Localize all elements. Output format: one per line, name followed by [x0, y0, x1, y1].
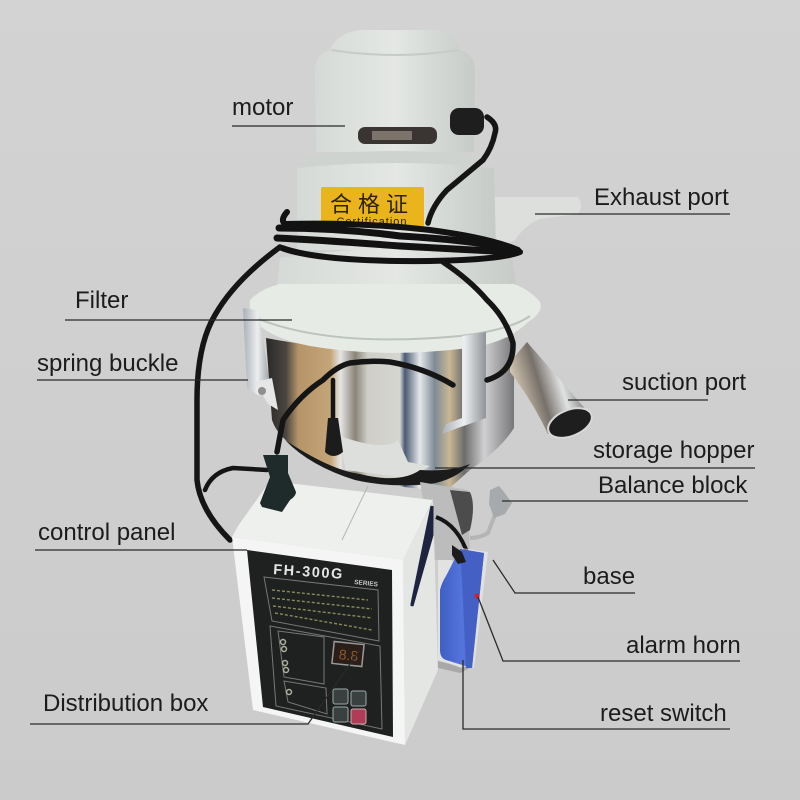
power plug — [260, 455, 296, 512]
labels: Exhaust port — [594, 184, 729, 211]
suction port pipe — [510, 342, 596, 444]
labels: suction port — [622, 369, 746, 396]
middle housing — [297, 163, 496, 250]
alarm horn — [440, 545, 488, 668]
spring buckle right — [442, 332, 486, 434]
cable gland — [450, 108, 484, 135]
lower dome — [276, 249, 518, 296]
spring buckle left — [243, 308, 278, 410]
neck and base — [420, 482, 470, 560]
power cables — [197, 117, 513, 540]
reflection in hopper — [340, 436, 430, 478]
labels: reset switch — [600, 700, 727, 727]
product: vacuum hopper loader — [197, 30, 596, 745]
labels — [37, 94, 754, 727]
keypad — [333, 689, 366, 724]
labels: base — [583, 563, 635, 590]
digital display — [332, 641, 364, 667]
storage hopper — [266, 336, 514, 492]
black panel: SERIES — [354, 579, 379, 589]
control box — [232, 481, 438, 745]
box right face — [403, 501, 438, 745]
indicator lights — [280, 640, 292, 694]
motor housing — [315, 30, 475, 152]
labels: spring buckle — [37, 350, 178, 377]
base plate — [432, 660, 470, 673]
labels: Balance block — [598, 472, 748, 499]
black panel: FH-300G — [273, 562, 345, 583]
small plug on hopper — [325, 418, 343, 456]
black panel: 8.8 — [338, 646, 359, 664]
filter lid — [250, 284, 541, 353]
certificate label: Certification — [336, 216, 408, 228]
box top face — [232, 481, 433, 560]
exhaust port elbow — [466, 197, 581, 244]
labels: storage hopper — [593, 437, 754, 464]
labels: Distribution box — [43, 690, 208, 717]
box front face — [232, 537, 405, 745]
leader lines — [30, 126, 755, 729]
motor vent slot — [358, 127, 437, 144]
labels: Filter — [75, 287, 128, 314]
cable bundle — [277, 212, 520, 261]
motor collar — [304, 151, 486, 165]
labels: control panel — [38, 519, 175, 546]
certificate label — [321, 187, 424, 228]
cord to alarm horn — [436, 517, 468, 555]
balance block — [470, 486, 512, 538]
labels: alarm horn — [626, 632, 741, 659]
labels: motor — [232, 94, 293, 121]
black panel — [247, 550, 393, 737]
certificate label: 合格证 — [330, 192, 414, 217]
hopper dark underside — [285, 440, 470, 485]
